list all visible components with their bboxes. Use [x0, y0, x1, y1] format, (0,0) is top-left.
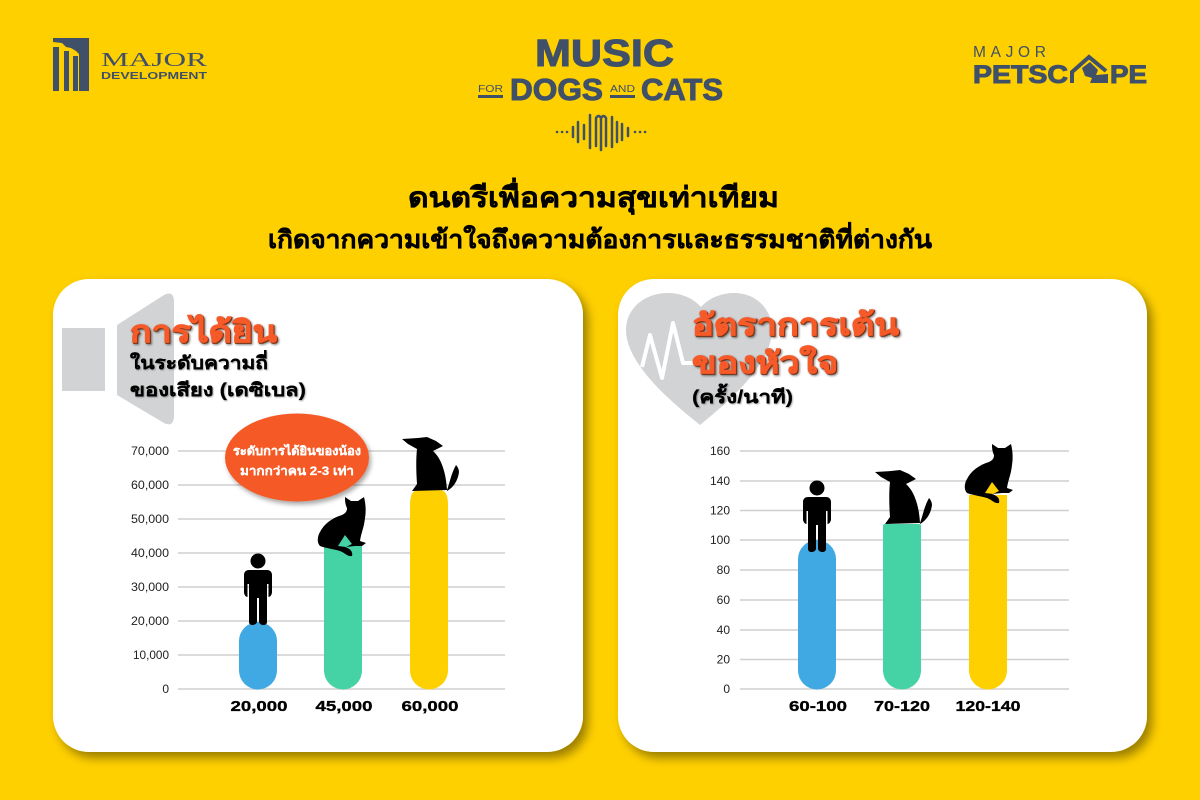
- bar chart: hearing: 40,000: [131, 546, 169, 560]
- logo: Major Development: MAJOR: [101, 49, 208, 71]
- callout: ระดับการได้ยินของน้อง: [233, 443, 361, 458]
- title: [268, 177, 932, 254]
- x labels: 60-100: [789, 698, 847, 715]
- subheading: hearing: ในระดับความถี่: [130, 350, 268, 373]
- logo: Music for Dogs and Cats: DOGS: [510, 72, 603, 107]
- icon: sound wave: [557, 115, 645, 150]
- bar chart: hearing: 10,000: [133, 648, 169, 662]
- bar chart: hearing: [131, 437, 505, 715]
- bar chart: heart rate: 120: [710, 504, 730, 518]
- bar chart: heart rate: 40: [717, 623, 730, 637]
- bar chart: heart rate: 20: [717, 652, 730, 666]
- title: ดนตรีเพื่อความสุขเท่าเทียม: [408, 177, 779, 215]
- bar: cat: [969, 495, 1007, 690]
- heading: heart rate: ของหัวใจ: [692, 345, 838, 380]
- x labels: [230, 698, 458, 715]
- callout: มากกว่าคน 2-3 เท่า: [240, 464, 354, 478]
- logo: Major Development: DEVELOPMENT: [101, 71, 207, 82]
- bar chart: heart rate: 100: [710, 533, 730, 547]
- x labels: 70-120: [874, 698, 930, 715]
- x labels: [789, 698, 1020, 715]
- logo: Major Petscape: [973, 44, 1147, 89]
- heading: heart rate: [692, 309, 900, 380]
- bar: dog: [883, 524, 921, 690]
- logo: Music for Dogs and Cats: MUSIC: [535, 33, 674, 75]
- logo: Major Petscape: MAJOR: [973, 44, 1046, 61]
- heading: heart rate: อัตราการเต้น: [692, 309, 900, 342]
- bar: human: [239, 622, 277, 690]
- bar: cat: [324, 546, 362, 690]
- x labels: 20,000: [230, 698, 288, 715]
- icon: dog: [875, 470, 932, 524]
- logo: Major Petscape: PETSC: [973, 61, 1068, 89]
- x labels: 120-140: [956, 698, 1020, 715]
- bar: dog: [410, 490, 448, 690]
- bar chart: heart rate: 80: [717, 563, 730, 577]
- subheading: hearing: ของเสียง (เดซิเบล): [130, 380, 306, 400]
- bar chart: hearing: 50,000: [131, 512, 169, 526]
- icon: cat: [318, 497, 366, 556]
- subheading: heart rate: (ครั้ง/นาที): [692, 383, 793, 407]
- bar chart: heart rate: 160: [710, 444, 730, 458]
- logo: Major Development: [53, 38, 208, 91]
- x labels: 45,000: [316, 698, 372, 715]
- bar chart: heart rate: [710, 444, 1069, 715]
- icon: heart: [626, 293, 772, 425]
- panel: hearing: [53, 279, 583, 752]
- logo: Music for Dogs and Cats: CATS: [641, 72, 723, 107]
- logo: Major Petscape: PE: [1110, 61, 1147, 89]
- logo: Music for Dogs and Cats: [478, 33, 723, 150]
- subheading: hearing: [130, 350, 306, 400]
- bar chart: heart rate: 140: [710, 474, 730, 488]
- logo: Music for Dogs and Cats: FOR: [478, 83, 503, 95]
- bar chart: hearing: 30,000: [131, 580, 169, 594]
- icon: cat: [965, 444, 1013, 503]
- bar chart: hearing: 0: [162, 682, 169, 696]
- x labels: 60,000: [402, 698, 458, 715]
- bar chart: hearing: 20,000: [131, 614, 169, 628]
- panel: heart rate: [618, 279, 1147, 752]
- heading: hearing: การได้ยิน: [130, 314, 278, 349]
- callout: [225, 414, 369, 502]
- bar: human: [798, 540, 836, 690]
- bar chart: heart rate: 0: [723, 682, 730, 696]
- icon: human: [803, 480, 831, 552]
- bar chart: hearing: 70,000: [131, 444, 169, 458]
- bar chart: heart rate: 60: [717, 593, 730, 607]
- logo: Music for Dogs and Cats: AND: [610, 83, 635, 95]
- icon: speaker: [62, 294, 174, 424]
- title: เกิดจากความเข้าใจถึงความต้องการและธรรมชาติที่ต่างกัน: [268, 222, 932, 254]
- icon: dog: [402, 437, 459, 491]
- bar chart: hearing: 60,000: [131, 478, 169, 492]
- icon: human: [244, 554, 272, 625]
